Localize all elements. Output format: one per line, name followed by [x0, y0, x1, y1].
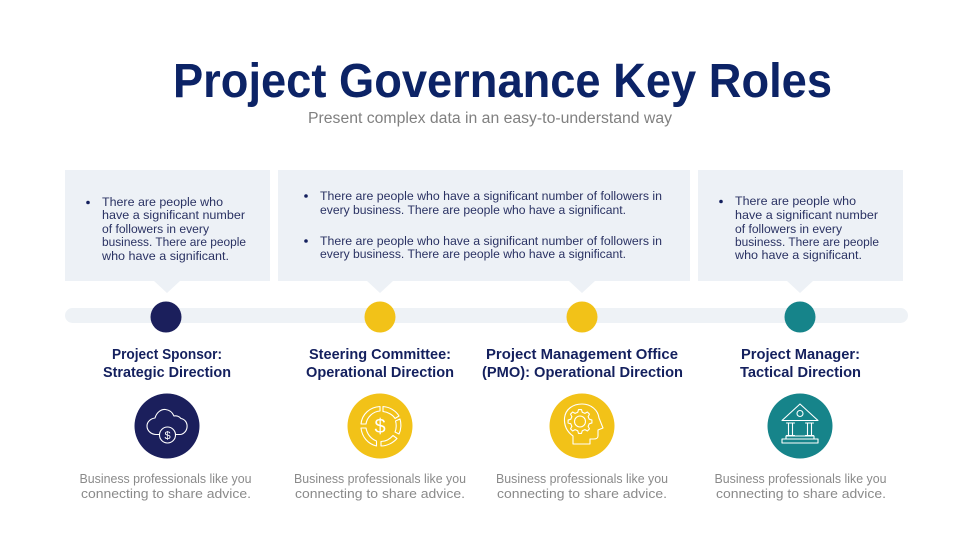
icon: cloud with dollar [134, 394, 200, 458]
timeline dot: project manager [784, 302, 816, 332]
description: project sponsor [80, 471, 252, 501]
heading: steering committee: Steering Committee: [309, 347, 451, 363]
panel: project manager callout: have a significant number [735, 208, 878, 222]
description: steering committee: connecting to share advice. [295, 486, 465, 501]
panel: steering committee and PMO callout: every business. There are people who have a significant. [320, 203, 626, 217]
heading: project sponsor [103, 347, 231, 381]
panel: project sponsor callout: have a significant number [102, 208, 245, 222]
heading: PMO: Project Management Office [486, 347, 678, 363]
description: project manager [714, 471, 886, 501]
icon: circular arrows with dollar: $ [374, 416, 386, 438]
subtitle: Present complex data in an easy-to-understand way [308, 110, 672, 127]
panel: project manager callout [698, 170, 903, 293]
icon: cloud with dollar: $ [164, 430, 171, 442]
panel: steering committee and PMO callout: There are people who have a significant number of followers in [320, 189, 662, 203]
panel: project sponsor callout [65, 170, 270, 293]
description: project sponsor: Business professionals like you [80, 471, 252, 486]
heading: project sponsor: Strategic Direction [103, 365, 231, 381]
panel: project manager callout: There are people who [735, 194, 856, 208]
description: PMO: connecting to share advice. [497, 486, 667, 501]
icon: head with gear [550, 394, 614, 458]
heading: PMO: (PMO): Operational Direction [482, 365, 683, 381]
heading: project manager [740, 347, 861, 381]
description: project manager: connecting to share advice. [716, 486, 886, 501]
description: project sponsor: connecting to share advice. [81, 486, 251, 501]
heading: project manager: Project Manager: [741, 347, 860, 363]
timeline dot: PMO [566, 302, 598, 332]
icon: classical building [768, 394, 832, 458]
heading: steering committee [306, 347, 454, 381]
panel: project sponsor callout: business. There are people [102, 235, 246, 249]
description: PMO [496, 471, 668, 501]
panel: project sponsor callout: who have a significant. [101, 249, 229, 263]
panel: steering committee and PMO callout: every business. There are people who have a significant. [320, 247, 626, 261]
panel: steering committee and PMO callout [278, 170, 690, 293]
heading: project manager: Tactical Direction [740, 365, 861, 381]
description: steering committee [294, 471, 466, 501]
panel: steering committee and PMO callout: There are people who have a significant number of followers in [320, 234, 662, 248]
panel: project manager callout: who have a significant. [734, 248, 862, 262]
description: project manager: Business professionals like you [714, 471, 886, 486]
heading: PMO [482, 347, 683, 381]
panel: project sponsor callout: of followers in every [102, 222, 210, 236]
timeline dot: project sponsor [150, 302, 182, 332]
timeline bar [65, 308, 908, 323]
timeline dot: steering committee [364, 302, 396, 332]
title: Project Governance Key Roles [173, 55, 832, 108]
heading: project sponsor: Project Sponsor: [112, 347, 222, 363]
icon: circular arrows with dollar [348, 394, 412, 458]
panel: project sponsor callout: There are people who [102, 195, 223, 209]
heading: steering committee: Operational Direction [306, 365, 454, 381]
description: steering committee: Business professionals like you [294, 471, 466, 486]
panel: project manager callout: business. There are people [735, 235, 879, 249]
description: PMO: Business professionals like you [496, 471, 668, 486]
panel: project manager callout: of followers in every [735, 222, 843, 236]
